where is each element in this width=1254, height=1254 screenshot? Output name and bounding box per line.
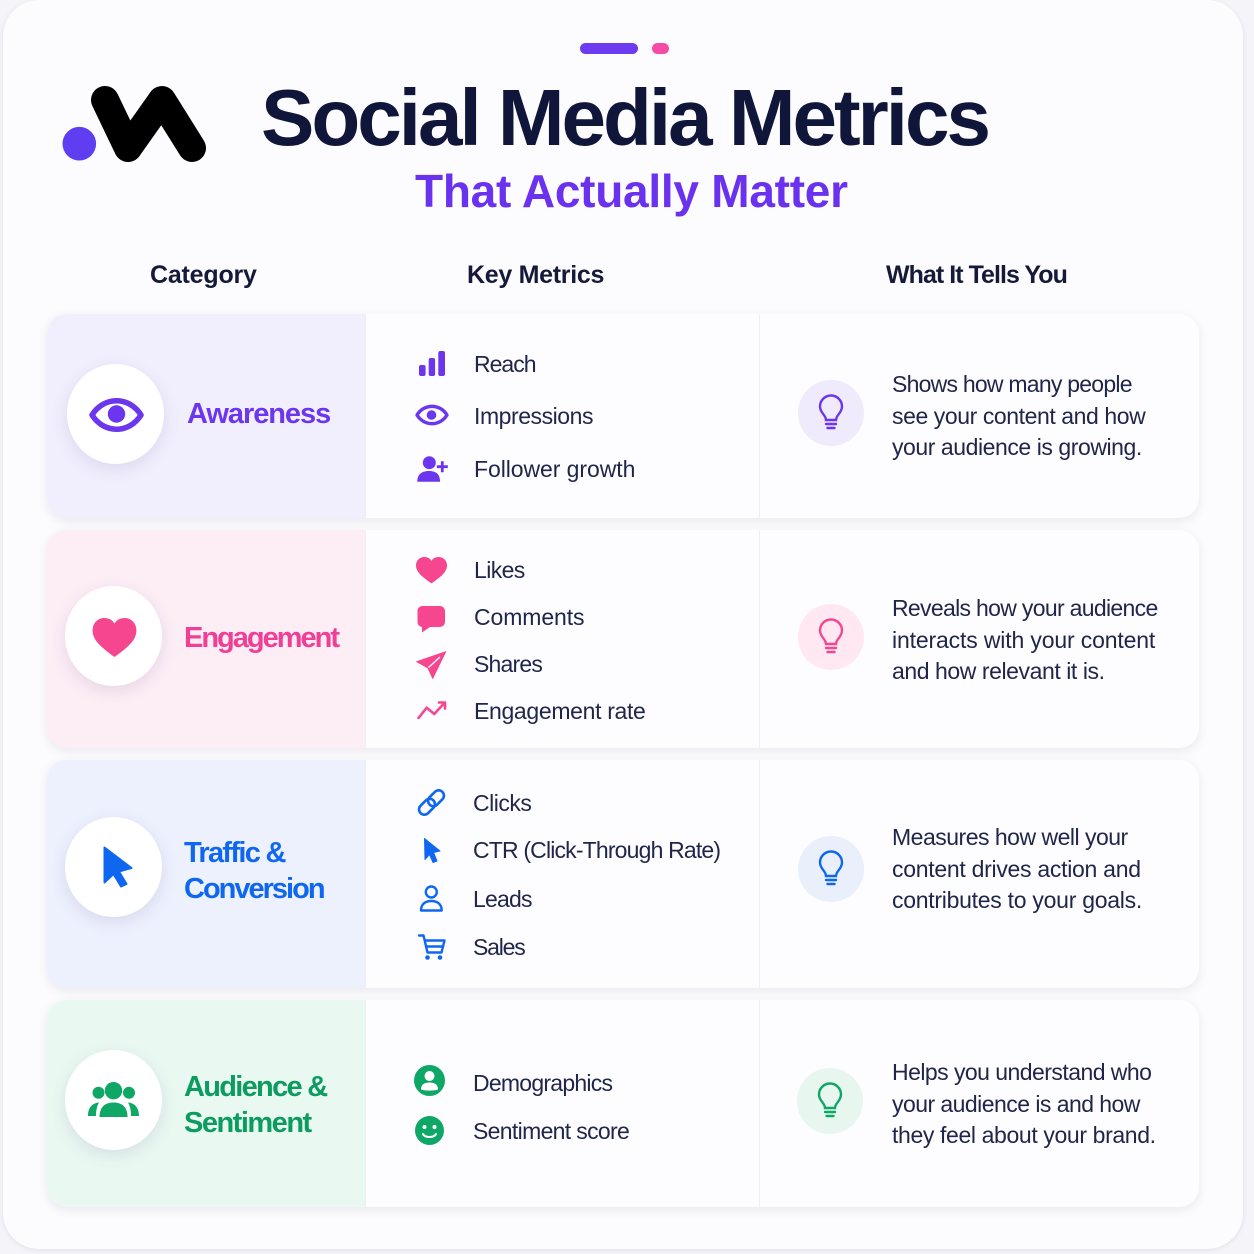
panel: audience and sentiment [47, 1000, 1199, 1207]
column heading: what it tells you: What It Tells You [886, 261, 1067, 289]
icon: follower growth [417, 456, 448, 482]
icon: traffic cursor [65, 817, 162, 917]
category: audience and sentiment [184, 1071, 328, 1139]
metric: leads: Leads [473, 886, 532, 912]
metric: ctr: CTR (Click-Through Rate) [473, 837, 720, 863]
metric: shares: Shares [474, 651, 542, 677]
column heading: category: Category [150, 261, 257, 289]
subtitle: That Actually Matter [415, 165, 848, 217]
description: audience [892, 1059, 1156, 1148]
decorative top pills [580, 43, 669, 54]
category: traffic and conversion: Traffic & [184, 837, 285, 869]
icon: awareness eye [67, 364, 164, 464]
icon: bulb engagement [798, 604, 864, 670]
icon: demographics [414, 1065, 445, 1096]
category: traffic and conversion [184, 837, 324, 905]
category: audience and sentiment: Sentiment [184, 1107, 311, 1139]
logo [62, 86, 206, 162]
category: audience and sentiment: Audience & [184, 1071, 327, 1103]
description: awareness: your audience is growing. [892, 434, 1142, 460]
icon: audience group [65, 1050, 162, 1150]
description: engagement: and how relevant it is. [892, 658, 1105, 684]
metric: sentiment: Sentiment score [473, 1118, 629, 1144]
description: engagement: Reveals how your audience [892, 595, 1158, 621]
category: engagement: Engagement [184, 622, 338, 654]
metric: clicks: Clicks [473, 790, 531, 816]
icon: bulb audience [797, 1068, 863, 1134]
metric: engagement rate: Engagement rate [474, 698, 646, 724]
icon: engagement rate [417, 701, 446, 720]
description: awareness: see your content and how [892, 402, 1145, 428]
icon: likes [416, 557, 447, 584]
description: awareness: Shows how many people [892, 371, 1132, 397]
icon: sales [418, 934, 446, 960]
panel: engagement [47, 530, 1199, 748]
icon: bulb traffic [798, 836, 864, 902]
icon: engagement heart [65, 586, 162, 686]
metric: reach: Reach [474, 351, 535, 377]
icon: impressions [415, 404, 449, 426]
description: engagement: interacts with your content [892, 626, 1155, 652]
description: awareness [892, 371, 1146, 460]
category: awareness: Awareness [187, 398, 330, 430]
description: traffic [892, 824, 1142, 913]
icon: bulb awareness [798, 380, 864, 446]
description: audience: Helps you understand who [892, 1059, 1151, 1085]
column heading: key metrics: Key Metrics [467, 261, 604, 289]
metric: follower growth: Follower growth [474, 456, 635, 482]
metric: demographics: Demographics [473, 1070, 612, 1096]
panel: traffic and conversion [47, 760, 1199, 988]
metric: impressions: Impressions [474, 403, 593, 429]
icon: leads [420, 885, 443, 912]
description: traffic: contributes to your goals. [892, 887, 1142, 913]
icon: ctr [424, 838, 440, 863]
description: engagement [892, 595, 1158, 684]
icon: sentiment [415, 1116, 444, 1145]
icon: comments [418, 606, 445, 632]
description: audience: your audience is and how [892, 1090, 1140, 1116]
description: traffic: Measures how well your [892, 824, 1128, 850]
metric: comments: Comments [474, 604, 584, 630]
description: audience: they feel about your brand. [892, 1122, 1156, 1148]
panel: awareness [47, 314, 1199, 518]
icon: shares [416, 651, 446, 679]
metric: sales: Sales [473, 934, 525, 960]
title: Social Media Metrics [261, 73, 988, 162]
metric: likes: Likes [474, 557, 525, 583]
category: traffic and conversion: Conversion [184, 873, 324, 905]
icon: clicks [418, 789, 446, 816]
icon: reach [419, 351, 445, 376]
description: traffic: content drives action and [892, 856, 1141, 882]
